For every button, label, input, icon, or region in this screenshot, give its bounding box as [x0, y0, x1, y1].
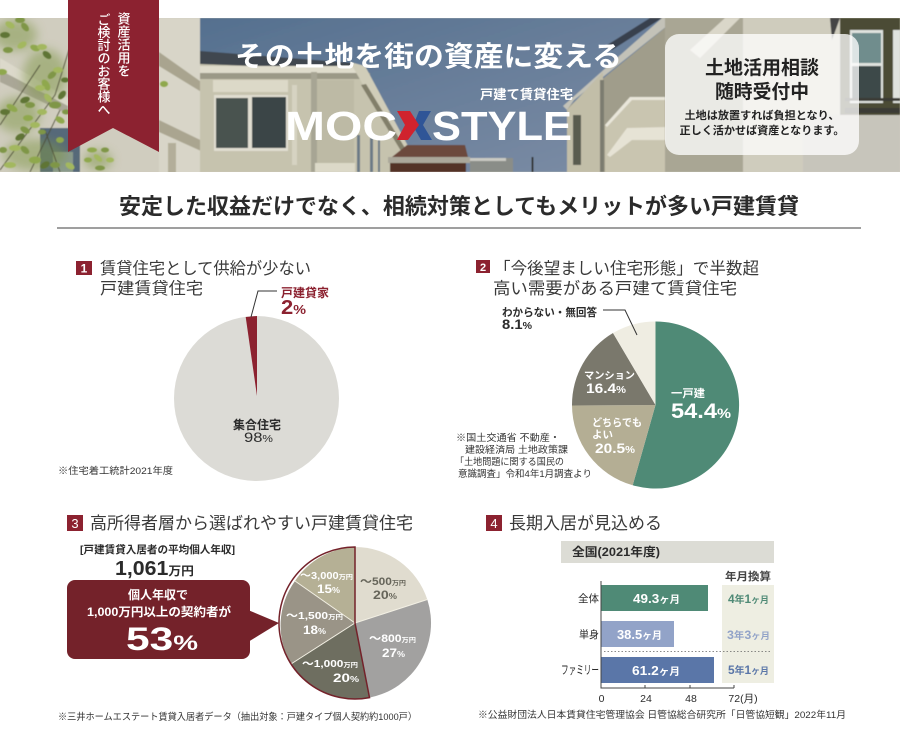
- consultation box: [665, 34, 859, 155]
- main heading: 安定した収益だけでなく、相続対策としてもメリットが多い戸建賃貸: [119, 194, 799, 219]
- note 2: 「土地問題に関する国民の: [455, 456, 564, 468]
- callout: 53%: [67, 580, 279, 659]
- bar chart: 0: [599, 693, 605, 705]
- ribbon: for asset owners: ご検討のお客様へ: [96, 12, 110, 116]
- panel 4: long-term tenancy: [478, 514, 846, 721]
- note 2: ※国土交通省 不動産・: [456, 432, 560, 444]
- note 4: ※公益財団法人日本賃貸住宅管理協会 日管協総合研究所「日管協短観」2022年11月: [478, 709, 846, 721]
- bar chart: 年月換算: [725, 569, 771, 583]
- bar chart: 単身: [579, 628, 599, 641]
- logo: MOCXSTYLE: 戸建て賃貸住宅: [480, 87, 573, 102]
- heading 1: 賃貸住宅として供給が少ない: [100, 259, 311, 278]
- logo: MOCXSTYLE: STYLE: [432, 103, 572, 149]
- heading 1: [76, 259, 311, 298]
- pie chart 1: 2%: [281, 297, 306, 319]
- pie chart 3: 15%: [317, 582, 340, 596]
- pie chart 2: 20.5 %: [595, 440, 635, 456]
- heading 1: 戸建賃貸住宅: [100, 279, 203, 298]
- callout: 53%: 53 %: [126, 621, 198, 657]
- logo: MOCXSTYLE: MOC: [285, 103, 397, 149]
- consultation box: 正しく活かせば資産となります。: [680, 123, 844, 137]
- pie chart 3: 〜800 万円: [369, 633, 417, 645]
- heading 2: 2: [480, 262, 486, 274]
- panel 3: high income: [58, 514, 431, 723]
- average income: [80, 543, 235, 580]
- bar chart: 38.5ヶ月: [617, 627, 662, 642]
- ribbon: for asset owners: [68, 0, 159, 152]
- callout: 53%: 1,000万円以上の契約者が: [87, 604, 231, 619]
- pie chart 3: 〜1,000 万円: [302, 658, 359, 670]
- callout: 53%: 個人年収で: [128, 587, 188, 602]
- pie chart 3: 20 %: [333, 671, 359, 685]
- pie chart 3: 〜1,500 万円: [286, 610, 344, 622]
- panel 1: supply: [58, 259, 339, 481]
- bar chart: [561, 541, 774, 705]
- bar chart: ファミリー: [561, 663, 599, 677]
- pie chart 3: 〜500 万円: [360, 576, 407, 588]
- pie chart 2: 54.4 %: [671, 400, 732, 423]
- pie chart 2: わからない・無回答: [502, 305, 597, 319]
- note 2: 意識調査」令和4年1月調査より: [458, 468, 592, 480]
- bar chart: 全国(2021年度): [572, 544, 660, 559]
- heading 2: 「今後望ましい住宅形態」で半数超: [494, 259, 759, 278]
- bar chart: 48: [685, 693, 697, 705]
- bar chart: 61.2ヶ月: [632, 663, 680, 678]
- pie chart 3: 〜3,000 万円: [300, 571, 354, 582]
- consultation box: 随時受付中: [715, 80, 809, 103]
- pie chart 2: どちらでも: [592, 416, 642, 429]
- logo: MOCXSTYLE: [285, 87, 573, 149]
- heading 2: [476, 259, 759, 298]
- note 3: ※三井ホームエステート賃貸入居者データ（抽出対象：戸建タイプ個人契約約1000戸）: [58, 711, 417, 723]
- banner photo: houses and sky: [0, 17, 900, 178]
- heading 3: 高所得者層から選ばれやすい戸建賃貸住宅: [90, 514, 413, 533]
- heading 2: 高い需要がある戸建て賃貸住宅: [493, 279, 737, 298]
- pie chart 2: 8.1%: [502, 316, 532, 332]
- ribbon: for asset owners: 資産活用を: [116, 12, 130, 77]
- bar chart: 5年1ヶ月: [728, 663, 769, 677]
- heading 3: 3: [71, 516, 79, 531]
- average income: [戸建賃貸入居者の平均個人年収]: [80, 543, 235, 556]
- banner title: その土地を街の資産に変える: [235, 41, 622, 72]
- pie chart 2: 一戸建: [671, 386, 705, 400]
- pie chart 3: [279, 547, 431, 699]
- pie chart 3: 20 %: [373, 588, 397, 602]
- bar chart: 4年1ヶ月: [728, 592, 769, 606]
- pie chart 3: 18%: [303, 623, 326, 637]
- pie chart 1: 戸建貸家: [281, 285, 329, 300]
- bar chart: 72(月): [728, 693, 758, 705]
- heading 4: 4: [490, 516, 498, 531]
- note 1: ※住宅着工統計2021年度: [58, 465, 174, 477]
- bar chart: 24: [640, 693, 652, 705]
- bar chart: 49.3ヶ月: [633, 591, 680, 606]
- pie chart 1: 98 %: [244, 429, 273, 445]
- pie chart 2: よい: [592, 429, 613, 441]
- panel 2: demand: [455, 259, 759, 488]
- heading 4: 長期入居が見込める: [509, 514, 662, 533]
- pie chart 3: 27%: [382, 646, 405, 660]
- consultation box: 土地活用相談: [705, 57, 819, 79]
- pie chart 2: [502, 305, 739, 488]
- pie chart 2: 16.4 %: [586, 380, 626, 396]
- consultation box: 土地は放置すれば負担となり、: [684, 108, 840, 122]
- bar chart: 全体: [578, 592, 599, 605]
- average income: 1,061 万円: [115, 558, 194, 580]
- note 2: 建設経済局 土地政策課: [465, 444, 569, 456]
- pie chart 2: マンション: [584, 371, 635, 382]
- bar chart: 3年3ヶ月: [727, 628, 770, 642]
- note 2: [455, 432, 592, 480]
- pie chart 1: 集合住宅: [233, 417, 281, 432]
- heading 1: 1: [81, 262, 88, 276]
- pie chart 1: [174, 285, 339, 481]
